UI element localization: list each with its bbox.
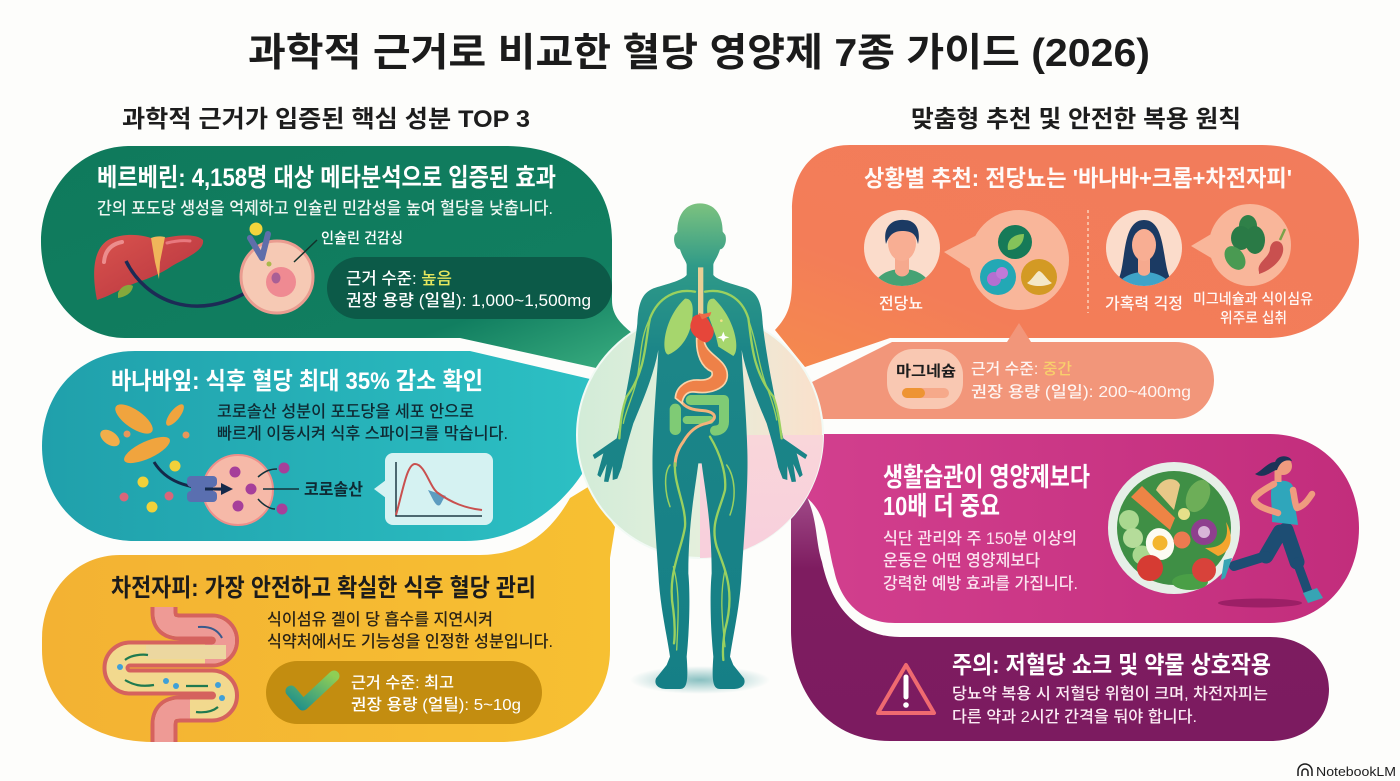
banaba description: 빠르게 이동시켜 식후 스파이크를 막습니다. bbox=[217, 424, 508, 443]
heart bbox=[690, 312, 714, 343]
icon: prediabetes person bbox=[864, 210, 940, 292]
icon: banaba seeds bbox=[97, 399, 190, 512]
caution description: 당뇨약 복용 시 저혈당 위험이 크며, 차전자피는 bbox=[952, 685, 1268, 703]
evidence pill: berberine: 근거 수준: 높음 bbox=[346, 269, 452, 288]
esophagus bbox=[693, 267, 709, 315]
magnesium badge bbox=[887, 349, 963, 409]
lungs bbox=[664, 299, 736, 356]
icon: warning triangle bbox=[878, 665, 934, 713]
notebooklm logo: NotebookLM bbox=[1316, 764, 1396, 779]
lifestyle description: 강력한 예방 효과를 가집니다. bbox=[883, 574, 1078, 593]
evidence pill: psyllium bbox=[266, 661, 542, 724]
icon: liver bbox=[94, 235, 203, 300]
corosolic acid label: 코로솔산 bbox=[304, 480, 363, 499]
evidence pill: psyllium: 근거 수준: 최고 bbox=[351, 674, 454, 692]
psyllium description: 식약처에서도 기능성을 인정한 성분입니다. bbox=[267, 632, 553, 651]
panel: lifestyle bbox=[806, 434, 1359, 623]
magnesium evidence text: 권장 용량 (일일): 200~400mg bbox=[971, 383, 1191, 401]
panel: banaba bbox=[42, 351, 590, 541]
small intestine bbox=[675, 400, 714, 467]
evidence pill: psyllium: 권장 용량 (얼틸): 5~10g bbox=[351, 696, 521, 714]
icon: runner bbox=[1218, 456, 1323, 608]
title: 과학적 근거로 비교한 혈당 영양제 7종 가이드 (2026) bbox=[248, 32, 1150, 75]
speech bubble: vegetables bbox=[1191, 204, 1291, 286]
heading: right column: 맞춤형 추천 및 안전한 복용 원칙 bbox=[911, 106, 1241, 133]
speech bubble: three supplements bbox=[944, 210, 1069, 310]
panel: berberine bbox=[41, 146, 632, 368]
human figure bbox=[593, 203, 807, 689]
label: magnesium and fiber: 미그네슐과 식이심유 bbox=[1193, 291, 1313, 308]
psyllium description: 식이섬유 겔이 당 흡수를 지연시켜 bbox=[267, 610, 493, 629]
lifestyle description: 운동은 어떤 영양제보다 bbox=[883, 551, 1040, 570]
heading: left column: 과학적 근거가 입증된 핵심 성분 TOP 3 bbox=[122, 106, 530, 133]
lifestyle heading: 10배 더 중요 bbox=[883, 491, 1000, 521]
icon: check mark bbox=[291, 676, 334, 705]
magnesium evidence text: 근거 수준: 중간 bbox=[971, 360, 1072, 378]
icon: salad plate bbox=[1108, 462, 1240, 594]
banaba description bbox=[217, 402, 508, 443]
backdrop circle bbox=[577, 312, 823, 558]
label: magnesium and fiber: 위주로 십취 bbox=[1220, 310, 1287, 327]
icon: insulin cell bbox=[241, 222, 313, 313]
psyllium description bbox=[267, 610, 553, 651]
label: prediabetes: 전당뇨 bbox=[879, 295, 923, 313]
magnesium evidence text bbox=[971, 360, 1191, 401]
lifestyle heading bbox=[883, 462, 1090, 521]
arrow: liver to cell bbox=[126, 261, 263, 306]
caution description bbox=[952, 685, 1268, 726]
magnesium badge: 마그네슘 bbox=[896, 363, 956, 380]
berberine description: 간의 포도당 생성을 억제하고 인슐린 민감성을 높여 혈당을 낮춥니다. bbox=[97, 199, 553, 218]
caution description: 다른 약과 2시간 간격을 둬야 합니다. bbox=[952, 708, 1197, 726]
berberine heading: 베르베린: 4,158명 대상 메타분석으로 입증된 효과 bbox=[97, 164, 556, 192]
lifestyle description bbox=[883, 529, 1078, 593]
panel: magnesium bbox=[800, 323, 1214, 419]
foot shadow bbox=[630, 666, 770, 694]
icon: intestine bbox=[116, 607, 226, 742]
cell callout label: 인슐린 건감싱 bbox=[321, 230, 403, 247]
banaba heading: 바나바잎: 식후 혈당 최대 35% 감소 확인 bbox=[111, 368, 483, 395]
psyllium heading: 차전자피: 가장 안전하고 확실한 식후 혈당 관리 bbox=[111, 574, 536, 602]
icon: family history person bbox=[1106, 210, 1182, 292]
corosolic acid label bbox=[263, 480, 363, 499]
panel: personalized recommendation bbox=[775, 145, 1359, 367]
central body diagram bbox=[577, 203, 823, 694]
recommendation heading: 상황별 추천: 전당뇨는 '바나바+크롬+차전자피' bbox=[864, 165, 1292, 191]
chart: post-meal glucose curve bbox=[374, 453, 493, 525]
caution heading: 주의: 저혈당 쇼크 및 약물 상호작용 bbox=[952, 652, 1271, 679]
label: magnesium and fiber bbox=[1193, 291, 1313, 327]
stomach bbox=[675, 338, 727, 403]
lifestyle heading: 생활습관이 영양제보다 bbox=[883, 462, 1090, 492]
banaba description: 코로솔산 성분이 포도당을 세포 안으로 bbox=[217, 402, 474, 421]
evidence pill: berberine: 권장 용량 (일일): 1,000~1,500mg bbox=[346, 291, 591, 310]
evidence pill: berberine bbox=[327, 257, 612, 319]
label: family history: 가혹력 긱정 bbox=[1105, 295, 1183, 313]
lifestyle description: 식단 관리와 주 150분 이상의 bbox=[883, 529, 1077, 548]
icon: glucose cell bbox=[154, 455, 290, 525]
large intestine bbox=[675, 400, 724, 431]
panel: psyllium bbox=[42, 487, 615, 742]
blood vessels bbox=[619, 291, 782, 660]
cell callout label bbox=[294, 230, 403, 262]
panel: caution bbox=[791, 495, 1329, 741]
